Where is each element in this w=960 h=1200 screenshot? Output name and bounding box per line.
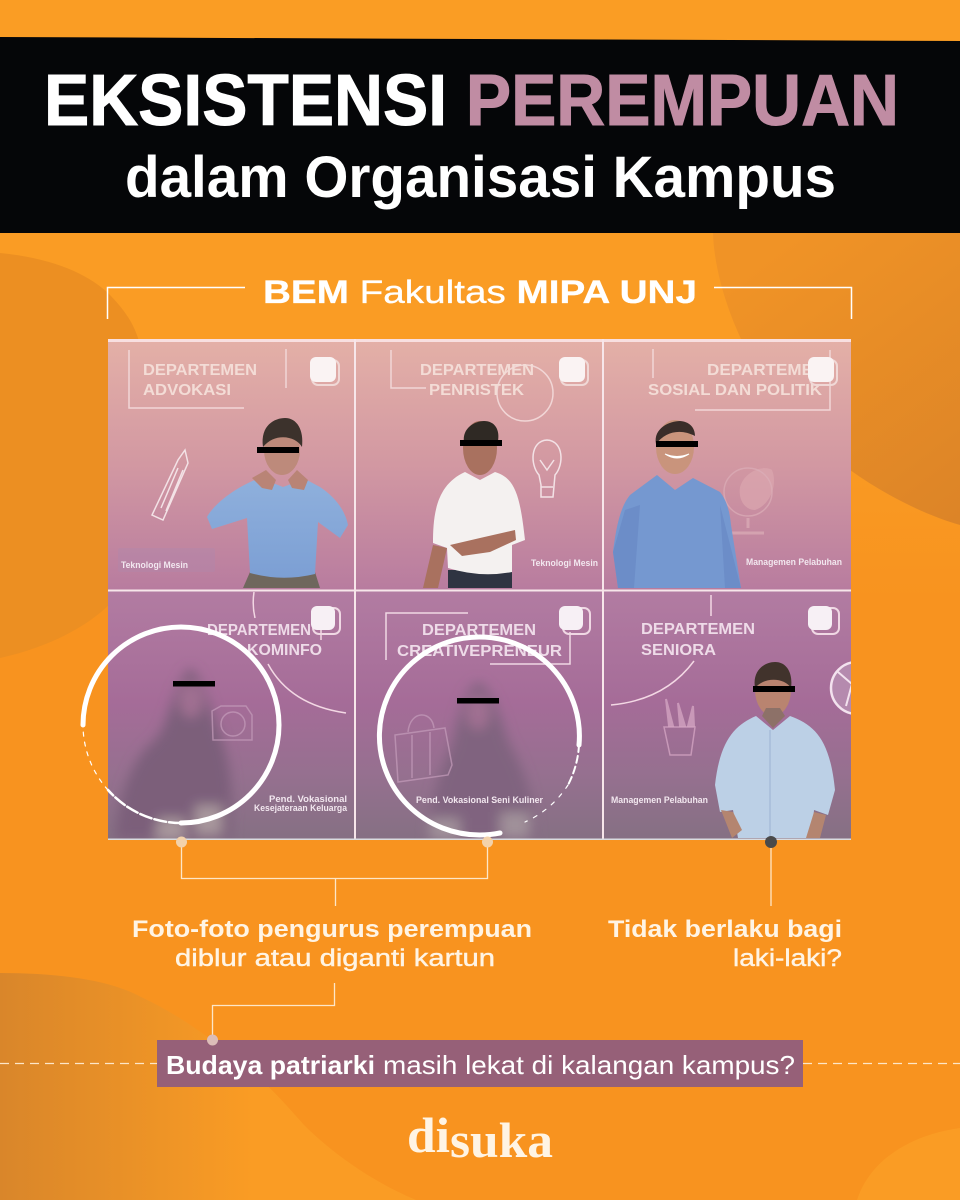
caption: blurred photos: Foto-foto pengurus perempuan [132, 916, 532, 943]
section heading: BEM Fakultas MIPA UNJ: BEM Fakultas MIPA UNJ [263, 274, 697, 310]
logo: disuka: di [407, 1107, 450, 1163]
panel: Departemen Sosial dan Politik: Managemen Pelabuhan [746, 557, 842, 568]
section heading: BEM Fakultas MIPA UNJ [108, 274, 852, 319]
panel: Departemen Creativepreneur (blurred woman) [386, 606, 590, 840]
logo: disuka [407, 1107, 553, 1168]
highlight circle: Kominfo [83, 627, 279, 823]
panel: Departemen Advokasi: ADVOKASI [143, 382, 231, 399]
person 3 [613, 420, 741, 588]
panel: Departemen Seniora [611, 595, 851, 838]
photo grid of department members [108, 339, 883, 840]
panel: Departemen Creativepreneur (blurred woman): CREATIVEPRENEUR [397, 643, 562, 660]
conclusion banner [157, 1040, 803, 1087]
highlight circle: Creativepreneur [379, 637, 579, 835]
panel: Departemen Sosial dan Politik [613, 349, 842, 588]
caption: not for men [608, 916, 842, 972]
panel: Departemen Creativepreneur (blurred woman): Pend. Vokasional Seni Kuliner [416, 795, 543, 806]
panel: Departemen Kominfo (blurred woman) [115, 592, 348, 840]
panel: Departemen Seniora: SENIORA [641, 642, 716, 659]
connector: caption to banner [207, 983, 334, 1046]
panel: Departemen Sosial dan Politik: DEPARTEME [707, 362, 813, 379]
panel: Departemen Penristek: Teknologi Mesin [531, 558, 598, 569]
connector: male photo to caption [765, 836, 777, 906]
panel: Departemen Kominfo (blurred woman): KOMINFO [247, 642, 322, 659]
panel: Departemen Advokasi: Teknologi Mesin [121, 560, 188, 571]
person 4 blurred [115, 668, 252, 840]
person 6 [715, 662, 835, 838]
title band [0, 37, 960, 233]
panel: Departemen Penristek: DEPARTEMEN [420, 362, 534, 379]
panel: Departemen Penristek [391, 350, 598, 588]
caption: not for men: Tidak berlaku bagi [608, 916, 842, 943]
panel: Departemen Seniora: DEPARTEMEN [641, 621, 755, 638]
person 2 [423, 421, 525, 588]
panel: Departemen Kominfo (blurred woman): Pend. Vokasional [269, 794, 347, 805]
panel: Departemen Penristek: PENRISTEK [429, 382, 524, 399]
caption: blurred photos [132, 916, 532, 972]
panel: Departemen Kominfo (blurred woman): Kesejateraan Keluarga [254, 803, 348, 814]
person 1 [207, 418, 348, 588]
dashed line [0, 1062, 960, 1064]
panel: Departemen Seniora: Managemen Pelabuhan [611, 795, 708, 806]
panel: Departemen Advokasi [118, 349, 348, 588]
title line 1: EKSISTENSI PEREMPUAN [44, 61, 899, 141]
caption: not for men: laki-laki? [733, 945, 842, 972]
panel: Departemen Creativepreneur (blurred woman): DEPARTEMEN [422, 622, 536, 639]
connector: blurred photos to caption [176, 836, 493, 906]
person 5 blurred [395, 682, 536, 840]
panel: Departemen Advokasi: DEPARTEMEN [143, 362, 257, 379]
panel: Departemen Sosial dan Politik: SOSIAL DAN POLITIK [648, 382, 822, 399]
caption: blurred photos: diblur atau diganti kartun [175, 945, 495, 972]
title line 2: dalam Organisasi Kampus [125, 145, 836, 210]
logo: disuka: suka [450, 1112, 553, 1168]
conclusion banner: Budaya patriarki [166, 1050, 375, 1080]
panel: Departemen Kominfo (blurred woman): DEPARTEMEN [207, 622, 311, 639]
conclusion banner: masih lekat di kalangan kampus? [383, 1050, 795, 1080]
grid dividers [108, 339, 851, 840]
